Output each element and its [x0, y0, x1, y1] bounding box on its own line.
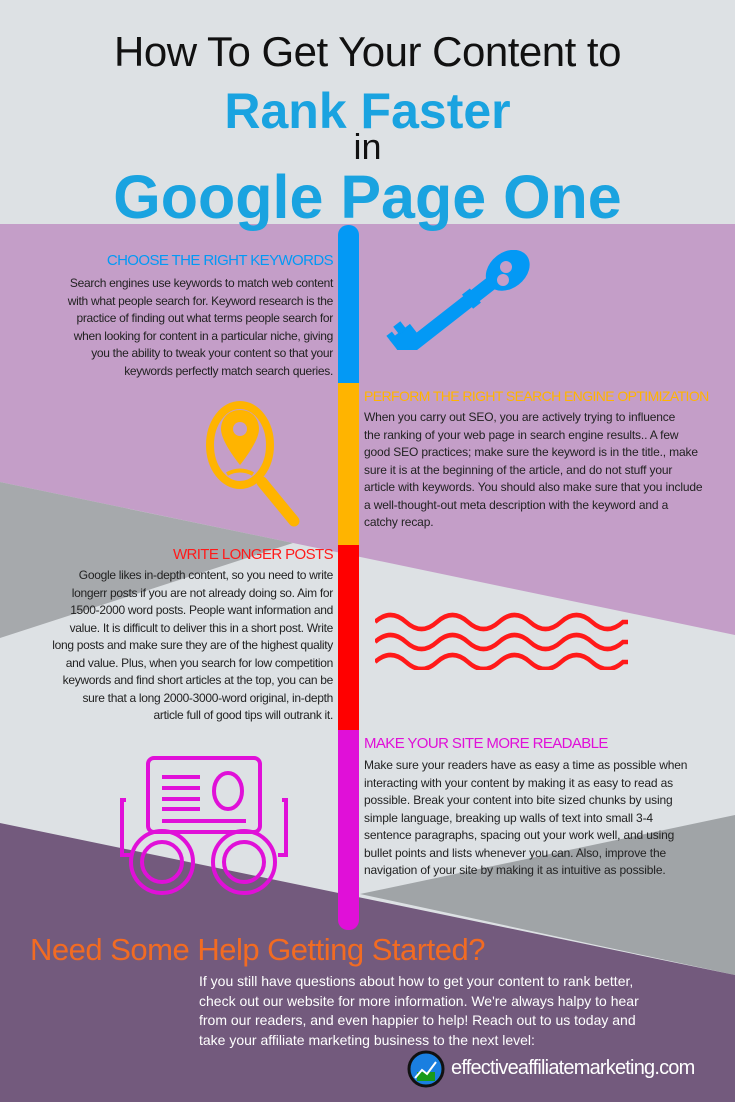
- icon: key: [386, 250, 530, 350]
- cta text: If you still have questions about how to get your content to rank better,: [199, 973, 633, 989]
- section 1 text: with what people search for. Keyword research is the: [68, 294, 333, 308]
- section 4 text: bullet points and lists whenever you can. Also, improve the: [364, 846, 666, 860]
- section 1 text: [68, 276, 334, 378]
- icon: device: [120, 756, 288, 895]
- section 2 text: [364, 410, 702, 529]
- section 3 text: [52, 568, 334, 722]
- section 3 text: long posts and make sure they are of the highest quality: [52, 638, 333, 652]
- section 2 text: a well-thought-out meta description with the keyword and a: [364, 498, 668, 512]
- section 3 heading: WRITE LONGER POSTS: [173, 546, 333, 563]
- section 1 text: Search engines use keywords to match web content: [70, 276, 333, 290]
- icon: waves: [375, 612, 628, 670]
- section 4 text: possible. Break your content into bite sized chunks by using: [364, 793, 673, 807]
- title: How To Get Your Content to: [114, 28, 621, 75]
- section 2 text: good SEO practices; make sure the keyword is in the title., make: [364, 445, 698, 459]
- section 2 text: sure it is at the beginning of the article, and do not stuff your: [364, 462, 672, 476]
- section 2 text: When you carry out SEO, you are actively trying to influence: [364, 410, 675, 424]
- section 3 text: sure that a long 2000-3000-word original, in-depth: [82, 690, 333, 704]
- cta text: from our readers, and even happier to help! Reach out to us today and: [199, 1012, 636, 1028]
- section 1 heading: CHOOSE THE RIGHT KEYWORDS: [107, 252, 333, 269]
- section 3 text: keywords and find short articles at the top, you can be: [63, 673, 333, 687]
- title: Rank Faster: [224, 83, 511, 139]
- section 2 text: article with keywords. You should also make sure that you include: [364, 480, 702, 494]
- section 4 text: sentence paragraphs, spacing out your work well, and using: [364, 828, 674, 842]
- section 4 text: [364, 758, 687, 877]
- cta heading: Need Some Help Getting Started?: [30, 932, 485, 967]
- section 2 text: the ranking of your web page in search engine results.. A few: [364, 428, 678, 442]
- title: Google Page One: [113, 163, 622, 231]
- section 1 text: keywords perfectly match search queries.: [124, 364, 333, 378]
- section 1 text: practice of finding out what terms people search for: [76, 311, 333, 325]
- section 4 text: interacting with your content by making it as easy to read as: [364, 776, 673, 790]
- section 4 text: navigation of your site by making it as intuitive as possible.: [364, 863, 666, 877]
- title: in: [353, 126, 382, 167]
- section 3 text: article full of good tips will outrank it.: [154, 708, 333, 722]
- section 1 text: when looking for content in a particular niche, giving: [74, 328, 333, 342]
- section 4 text: simple language, breaking up walls of text into small 3-4: [364, 810, 653, 824]
- icon: search pin: [206, 401, 300, 526]
- section 4 text: Make sure your readers have as easy a time as possible when: [364, 758, 687, 772]
- cta text: check out our website for more information. We're always halpy to hear: [199, 992, 639, 1008]
- section 2 heading: PERFORM THE RIGHT SEARCH ENGINE OPTIMIZATION: [364, 388, 709, 404]
- section 2 text: catchy recap.: [364, 515, 433, 529]
- cta text: [199, 973, 639, 1048]
- cta text: take your affiliate marketing business to the next level:: [199, 1032, 535, 1048]
- section 1 text: you the ability to tweak your content so that your: [91, 346, 333, 360]
- title: [113, 28, 622, 231]
- section 3 text: value. It is difficult to deliver this in a short post. Write: [70, 620, 333, 634]
- timeline bar: [338, 225, 359, 930]
- section 3 text: Google likes in-depth content, so you need to write: [79, 568, 333, 582]
- section 3 text: and value. Plus, when you search for low competition: [66, 656, 333, 670]
- section 4 heading: MAKE YOUR SITE MORE READABLE: [364, 735, 608, 752]
- section 3 text: 1500-2000 word posts. People want information and: [70, 603, 333, 617]
- section 3 text: longerr posts if you are not already doing so. Aim for: [72, 586, 333, 600]
- logo: effectiveaffiliatemarketing.com: [451, 1057, 694, 1079]
- logo: [408, 1050, 694, 1088]
- icon: logo chart: [408, 1050, 444, 1088]
